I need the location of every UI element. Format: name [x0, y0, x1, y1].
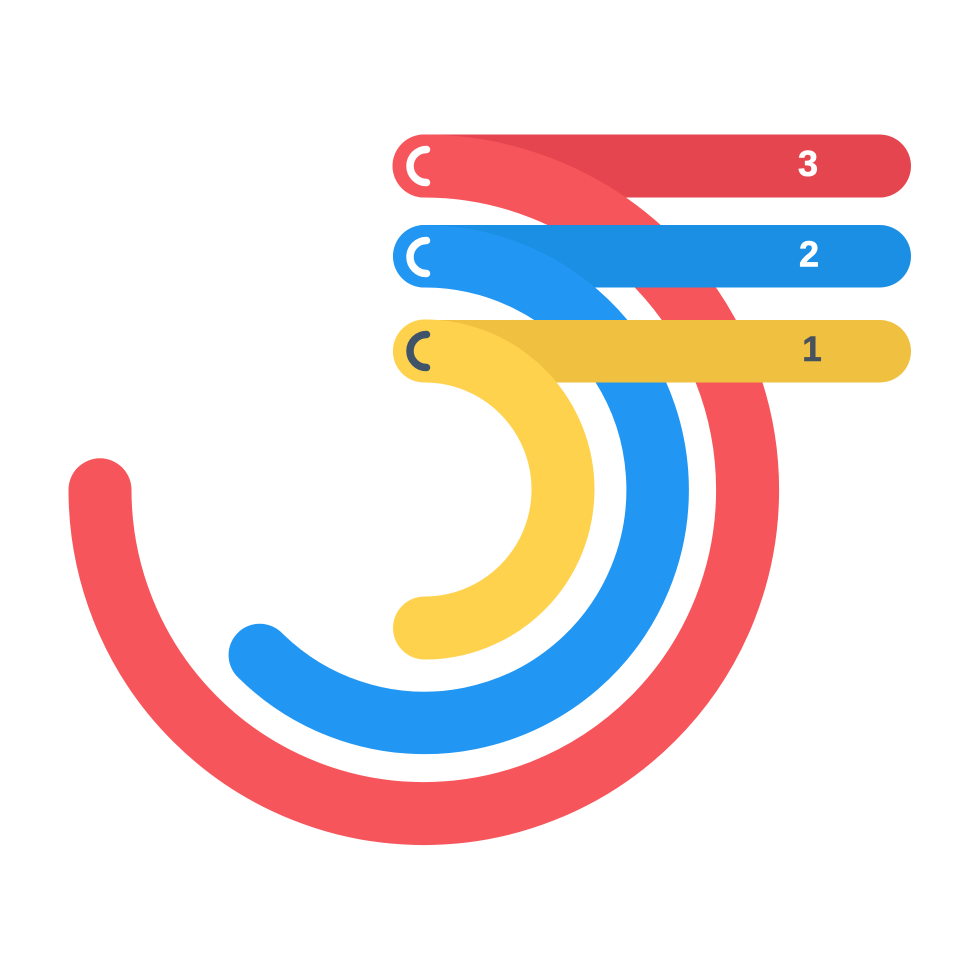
red arc: [100, 166, 748, 814]
icon: ring marker 2: [410, 240, 426, 274]
icon: ring marker 1: [410, 334, 426, 368]
yellow arc: [424, 351, 563, 628]
label 3: 3: [798, 143, 818, 184]
label 1: 1: [802, 330, 822, 369]
bar 1 background: [393, 320, 911, 382]
blue arc: [260, 256, 658, 723]
icon: ring marker 3: [410, 150, 426, 182]
bar 2 background: [393, 225, 911, 288]
label 2: 2: [799, 234, 819, 274]
bar 3 background: [393, 134, 911, 198]
